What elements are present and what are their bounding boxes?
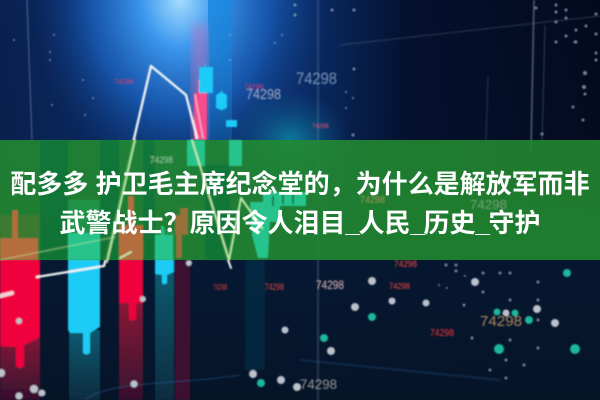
dots: teal: [257, 269, 580, 387]
band trend line: [0, 140, 262, 262]
title: 配多多 护卫毛主席纪念堂的，为什么是解放军而非: [10, 169, 590, 199]
price labels: 74298: [300, 376, 337, 392]
title: [10, 169, 590, 238]
title: 武警战士？原因令人泪目_人民_历史_守护: [60, 208, 540, 238]
price labels: 74298: [296, 69, 337, 88]
band price labels: 74298: [470, 197, 507, 212]
band price labels: 74298: [150, 155, 173, 166]
green title band: [0, 140, 600, 260]
price labels: 74298: [244, 84, 264, 91]
white trend line: [0, 66, 231, 296]
band price labels: 74298: [360, 195, 385, 206]
band candles: mint: [68, 140, 306, 260]
dots: white: [0, 260, 559, 400]
candlesticks: cyan: [68, 63, 237, 354]
price labels: 74298: [394, 259, 417, 270]
price labels: [114, 69, 522, 392]
band mint tick marks: [272, 194, 294, 206]
price labels: 74298: [312, 124, 329, 130]
price labels: 74298: [213, 283, 227, 292]
band candles: orange: [0, 196, 188, 260]
price labels: 74298: [246, 86, 281, 103]
price labels: 74298: [389, 281, 410, 291]
price labels: 74298: [114, 79, 134, 86]
candlesticks: red: [0, 215, 143, 368]
price labels: 74298: [265, 282, 284, 292]
candlestick: pink: [194, 80, 207, 140]
band columns: [40, 140, 230, 260]
candle shadow columns: [0, 260, 265, 400]
price labels: 74298: [430, 328, 454, 339]
price labels: 74298: [480, 313, 522, 330]
band price labels: [150, 155, 507, 212]
price labels: 74298: [316, 278, 344, 292]
